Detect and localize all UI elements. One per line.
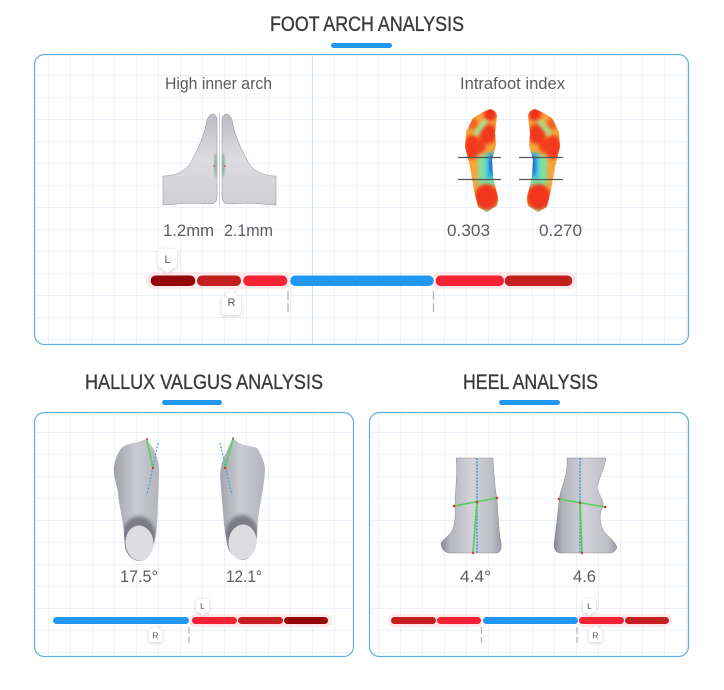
panel: hallux valgus analysis xyxy=(34,412,354,656)
label: high inner arch: High inner arch xyxy=(165,74,272,93)
icon: left foot hallux angle xyxy=(114,438,159,561)
marker: R on heel scale: R xyxy=(592,630,599,640)
marker: L on arch scale: L xyxy=(164,254,171,266)
scale bar: hallux valgus xyxy=(53,614,332,643)
value: right intrafoot index: 0.270 xyxy=(539,221,582,240)
label: intrafoot index: Intrafoot index xyxy=(460,74,565,93)
marker: R on arch scale xyxy=(222,289,241,315)
marker: L on heel scale xyxy=(583,599,596,616)
marker: R on arch scale: R xyxy=(228,297,236,309)
title: hallux valgus analysis xyxy=(85,371,323,405)
value: left arch height: 1.2mm xyxy=(163,221,214,240)
marker: R on hallux scale xyxy=(149,625,162,642)
marker: L on heel scale: L xyxy=(587,601,592,611)
icon: plantar pressure heat maps xyxy=(458,105,565,215)
marker: R on hallux scale: R xyxy=(152,630,159,640)
value: right hallux angle: 12.1° xyxy=(226,567,262,586)
marker: L on hallux scale: L xyxy=(200,601,205,611)
icon: right heel alignment xyxy=(554,458,617,554)
marker: R on heel scale xyxy=(589,625,602,642)
marker: L on arch scale xyxy=(158,249,177,273)
title: foot arch analysis xyxy=(270,13,464,48)
marker: L on hallux scale xyxy=(196,599,209,616)
value: left heel angle: 4.4° xyxy=(460,567,491,586)
icon: inner arch foot sections xyxy=(163,113,276,206)
title: foot arch analysis: FOOT ARCH ANALYSIS xyxy=(270,13,464,36)
value: left hallux angle: 17.5° xyxy=(120,567,158,586)
value: left intrafoot index: 0.303 xyxy=(447,221,490,240)
title: heel analysis xyxy=(463,371,598,405)
icon: right foot hallux angle xyxy=(219,438,265,560)
value: right heel angle: 4.6 xyxy=(573,567,596,586)
panel: foot arch analysis xyxy=(34,54,688,344)
icon: left heel alignment xyxy=(441,458,501,554)
title: heel analysis: HEEL ANALYSIS xyxy=(463,371,598,394)
scale bar: heel xyxy=(388,614,672,643)
panel: heel analysis xyxy=(370,412,688,656)
scale bar: foot arch xyxy=(146,272,577,315)
value: right arch height: 2.1mm xyxy=(224,221,273,240)
title: hallux valgus analysis: HALLUX VALGUS ANALYSIS xyxy=(85,371,323,394)
